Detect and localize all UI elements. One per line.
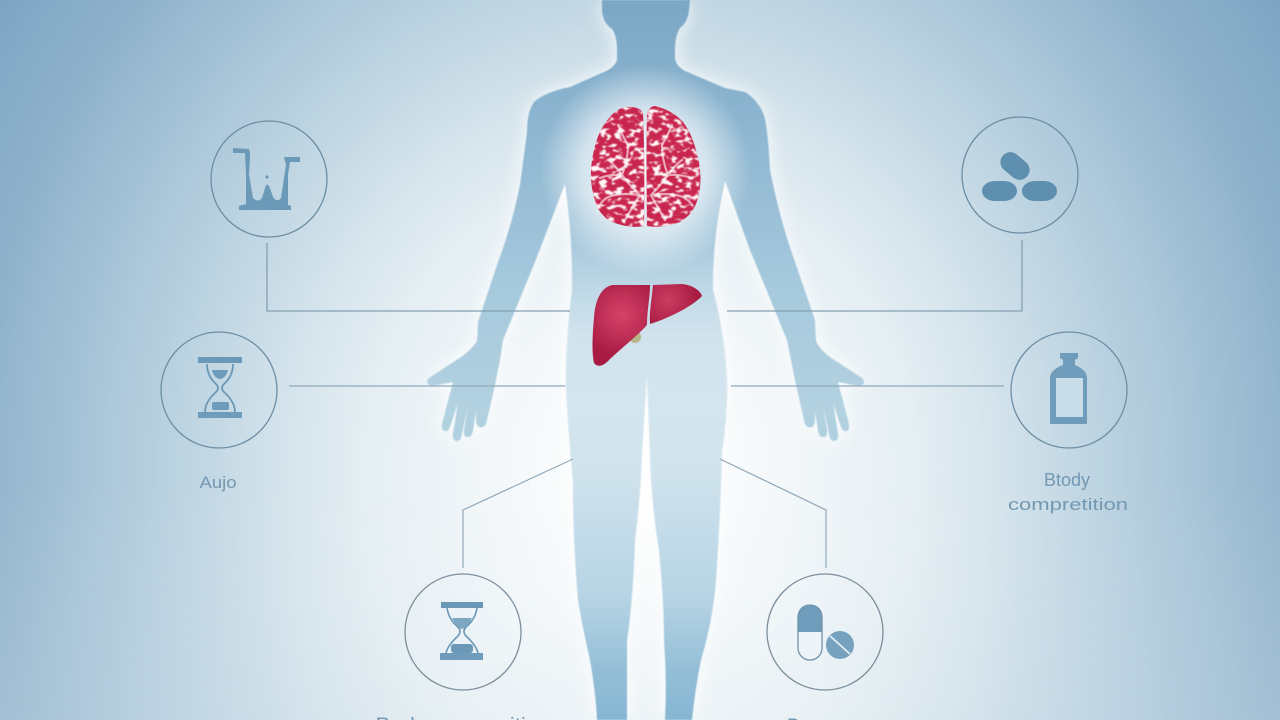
silhouette figure	[427, 0, 864, 720]
label: left: Aujo	[200, 473, 236, 492]
chest glow	[540, 65, 750, 275]
liver left lobe	[592, 285, 650, 366]
label: right	[1008, 470, 1128, 514]
liver right lobe	[650, 284, 702, 324]
icon: top left vessel	[211, 121, 327, 237]
gallbladder	[629, 331, 641, 343]
connector: top left	[267, 243, 570, 311]
icon: middle left hourglass	[161, 332, 277, 448]
icon: bottom right capsule and tablet	[767, 574, 883, 690]
label: right: Btody	[1044, 470, 1090, 490]
icon: middle right bottle	[1011, 332, 1127, 448]
silhouette glow	[427, 0, 864, 720]
connector: bottom left	[463, 459, 573, 568]
icon: top right tablets	[962, 117, 1078, 233]
torso and thigh lightening	[566, 242, 727, 626]
connector: middle left	[289, 385, 565, 387]
icon: liver	[592, 284, 702, 366]
icon: bottom left hourglass	[405, 574, 521, 690]
panel: body silhouette	[427, 0, 864, 720]
icon: brain-patterned organ	[591, 106, 700, 227]
label: right: compretition	[1008, 495, 1128, 514]
connector: middle right	[731, 385, 1004, 387]
connector: bottom right	[720, 459, 826, 568]
background bottom lightening	[0, 480, 1280, 720]
connector: top right	[727, 240, 1022, 311]
